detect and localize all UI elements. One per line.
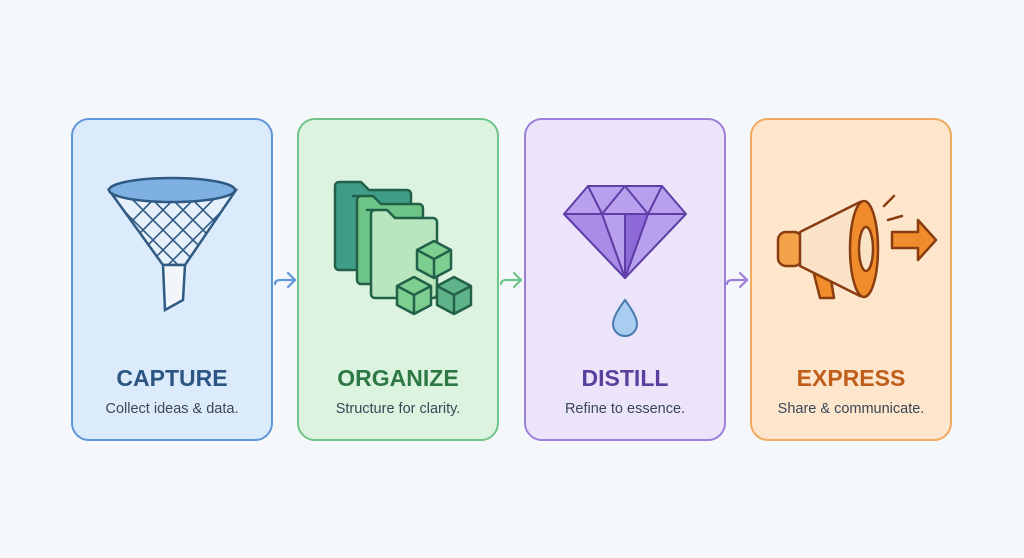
icon: folders and cubes: [334, 180, 472, 316]
panel: express: [750, 118, 952, 441]
icon: funnel: [106, 176, 238, 312]
arrow 2: [500, 272, 522, 288]
text: capture: Collect ideas & data.: [106, 401, 238, 417]
text: distill: Refine to essence.: [565, 401, 685, 417]
arrow 3: [726, 272, 748, 288]
icon: diamond and drop: [563, 185, 687, 337]
text: express: Share & communicate.: [778, 401, 924, 417]
arrow 1: [274, 272, 296, 288]
text: organize: Structure for clarity.: [336, 401, 460, 417]
panel: capture: [71, 118, 273, 441]
panel: organize: [297, 118, 499, 441]
title: organize: ORGANIZE: [337, 365, 459, 391]
title: express: EXPRESS: [797, 365, 905, 391]
title: capture: CAPTURE: [116, 365, 228, 391]
title: distill: DISTILL: [582, 365, 668, 391]
icon: megaphone: [776, 194, 938, 300]
panel: distill: [524, 118, 726, 441]
